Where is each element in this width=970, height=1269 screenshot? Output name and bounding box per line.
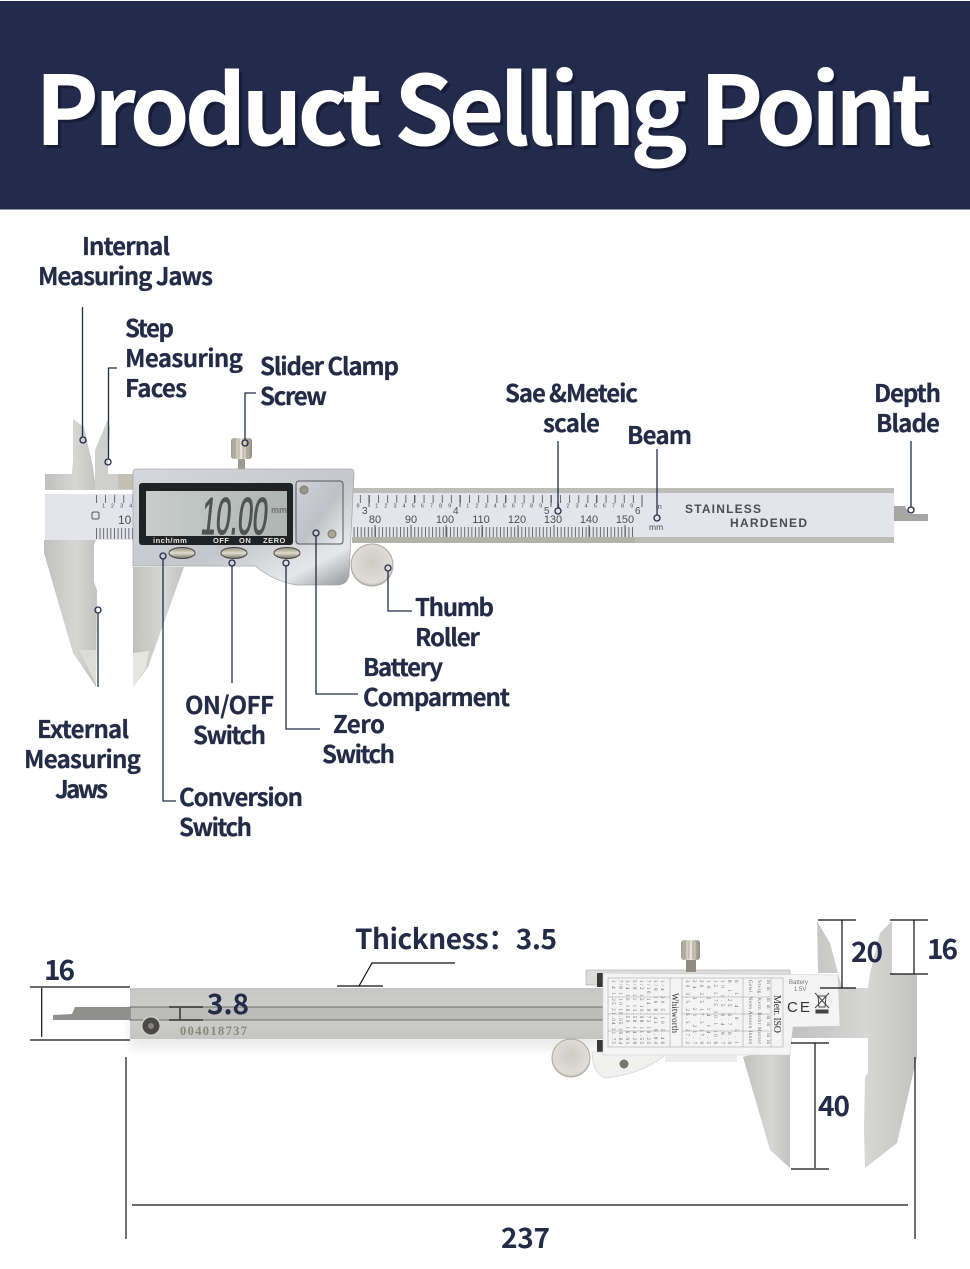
table values: 5/8 11 13.58 14.28 xyxy=(631,980,636,1044)
beam scales: 123456789 xyxy=(557,504,639,510)
table values: 1/2 12 10.98 11.55 xyxy=(638,980,643,1044)
label: Thumb Roller: Thumb xyxy=(415,588,494,623)
dimension: thickness 3.5: Thickness：3.5 xyxy=(355,918,557,958)
beam scales: 123456789 xyxy=(466,504,548,510)
beam scales: 123456789 xyxy=(375,504,457,510)
beam scales: 6 xyxy=(635,506,641,517)
sticker with tables: Metr. ISO xyxy=(771,995,782,1033)
leader lines and markers xyxy=(80,307,914,801)
label: External Measuring Jaws: External xyxy=(37,710,129,745)
label: ON/OFF Switch: Switch xyxy=(193,716,266,751)
table values: 3/8 16 8.43 8.80 xyxy=(652,980,657,1045)
table values: 7/16 14 9.73 10.25 xyxy=(645,980,650,1044)
beam scales: 130 xyxy=(544,514,562,526)
dimension: outer jaw 40: 40 xyxy=(818,1085,850,1125)
LCD display: inch/mm xyxy=(153,536,187,545)
beam engraving xyxy=(685,502,807,530)
label: Battery Comparment xyxy=(363,648,510,713)
beam scales: 4 xyxy=(453,506,459,517)
label: Internal Measuring Jaws: Measuring Jaws xyxy=(38,257,213,292)
table values: 8 1.25 6.7 6.9 xyxy=(726,980,731,1044)
table values: Gewi. Nenn Aussen Innen xyxy=(747,980,752,1044)
beam scales: mm xyxy=(649,522,663,532)
label: Slider Clamp Screw xyxy=(260,347,399,412)
beam scales: 150 xyxy=(616,514,634,526)
serial number: 004018737 xyxy=(180,1024,247,1038)
sticker with tables: Whitworth xyxy=(670,993,680,1034)
label: Depth Blade: Blade xyxy=(876,404,940,439)
slider clamp screw xyxy=(231,438,252,470)
LCD display: mm xyxy=(271,505,287,515)
back clamp screw xyxy=(681,940,700,972)
beam engraving: HARDENED xyxy=(730,516,807,530)
label: Sae & Meteic scale: Sae &Meteic xyxy=(505,374,638,409)
caliper back view xyxy=(53,921,917,1168)
fixed scale block: 1234 xyxy=(102,504,138,510)
label: Zero Switch xyxy=(322,705,395,770)
beam scales: 9 xyxy=(356,504,366,510)
label: External Measuring Jaws: Jaws xyxy=(55,770,108,805)
label: ON/OFF Switch: ON/OFF xyxy=(185,686,274,721)
beam scales: 80 xyxy=(369,514,381,526)
beam engraving: STAINLESS xyxy=(685,502,761,516)
label: Step Measuring Faces: Step xyxy=(125,309,174,344)
depth blade xyxy=(894,506,928,521)
dimension: inner jaw 16: 16 xyxy=(927,928,958,968)
label: Battery Comparment: Battery xyxy=(363,648,443,683)
label: Internal Measuring Jaws: Internal xyxy=(82,227,170,262)
screw xyxy=(141,1016,161,1036)
back jaws xyxy=(665,921,917,1168)
beam scales: 140 xyxy=(580,514,598,526)
label: Conversion Switch: Conversion xyxy=(179,778,303,813)
table values: 10 1.5 8.4 8.7 xyxy=(719,980,724,1044)
table values: 7/8 1 10 19.05 19.64 xyxy=(617,980,622,1044)
battery compartment xyxy=(296,481,343,544)
label: Depth Blade: Depth xyxy=(874,374,941,409)
table values: 6 1 4.9 5.1 xyxy=(733,980,738,1044)
beam scales xyxy=(354,495,663,537)
dimension lines xyxy=(30,920,928,1239)
label: Thumb Roller: Roller xyxy=(415,618,481,653)
table values: 12 1.75 10.1 10.6 xyxy=(712,980,717,1044)
beam scales: in xyxy=(656,502,662,511)
label: Slider Clamp Screw: Slider Clamp xyxy=(260,347,399,382)
label: Conversion Switch: Switch xyxy=(179,808,252,843)
label: Sae & Meteic scale: scale xyxy=(543,404,600,439)
beam xyxy=(352,488,894,543)
external measuring jaws xyxy=(44,540,184,687)
dimension: blade height 16: 16 xyxy=(44,949,75,989)
table values: 16 2 14 14.5 xyxy=(705,980,710,1044)
label: ON/OFF Switch xyxy=(185,686,274,751)
slider back plate xyxy=(586,970,790,1078)
header banner xyxy=(0,1,970,210)
caliper front view xyxy=(44,419,928,687)
table grid xyxy=(608,978,783,1047)
LCD display: ON xyxy=(239,536,251,545)
label: External Measuring Jaws xyxy=(24,710,141,805)
LCD display xyxy=(139,483,293,546)
LCD display: OFF xyxy=(213,536,230,545)
label: Conversion Switch xyxy=(179,778,303,843)
sticker with tables: Battery xyxy=(789,980,808,986)
title: Product Selling Point xyxy=(35,34,932,173)
LCD display: 10.00 xyxy=(199,488,271,546)
label: Thumb Roller xyxy=(415,588,494,653)
table values: 1 4 1.25 21.04 21.75 xyxy=(610,980,615,1044)
label: Slider Clamp Screw: Screw xyxy=(260,377,327,412)
thumb roller xyxy=(351,544,393,586)
table values: 1/4 20 5.10 5.46 xyxy=(659,980,664,1045)
label: Zero Switch: Switch xyxy=(322,735,395,770)
label: Internal Measuring Jaws xyxy=(38,227,213,292)
internal measuring jaws xyxy=(45,419,133,490)
table values: mm mm mm mm xyxy=(765,980,770,1044)
label: Beam: Beam xyxy=(627,416,692,451)
back beam xyxy=(130,988,604,1039)
beam scales: 3 xyxy=(362,506,368,517)
back depth blade xyxy=(53,1007,130,1020)
table values: 24 3 21 21.7 xyxy=(691,980,696,1044)
dimension: blade width 3.8: 3.8 xyxy=(207,983,249,1023)
label: Depth Blade xyxy=(874,374,941,439)
beam scales: 110 xyxy=(472,514,490,526)
table values: 30 3.5 26.5 27.2 xyxy=(684,980,689,1044)
label: Step Measuring Faces xyxy=(125,309,243,404)
beam scales: 120 xyxy=(508,514,526,526)
label: External Measuring Jaws: Measuring xyxy=(24,740,141,775)
label: Battery Comparment: Comparment xyxy=(363,678,510,713)
WEEE icon xyxy=(815,993,829,1013)
fixed scale block xyxy=(45,494,138,540)
back thumb roller xyxy=(552,1039,590,1077)
dimension: total length 237: 237 xyxy=(501,1217,550,1257)
table values: Steig. Kern Bohr Mutter xyxy=(756,980,761,1044)
label: Step Measuring Faces: Measuring xyxy=(125,339,243,374)
soft shadow xyxy=(130,1005,600,1049)
sticker with tables: 1.5V xyxy=(794,987,806,993)
label: Step Measuring Faces: Faces xyxy=(125,369,187,404)
label: Zero Switch: Zero xyxy=(333,705,385,740)
dimension: inner jaw 20: 20 xyxy=(851,931,883,971)
table values: 20 2.5 17.3 17.9 xyxy=(698,980,703,1044)
sticker with tables: CE xyxy=(787,999,812,1016)
table values: 3/4 10 16.50 16.93 xyxy=(624,980,629,1044)
buttons xyxy=(169,548,300,558)
label: Sae & Meteic scale xyxy=(505,374,638,439)
slider body xyxy=(133,469,354,585)
LCD display: ZERO xyxy=(263,536,286,545)
table values xyxy=(610,980,770,1044)
beam scales: 100 xyxy=(436,514,454,526)
beam scales: 90 xyxy=(405,514,417,526)
title: Product Selling Point xyxy=(38,37,935,176)
fixed scale block: 10 xyxy=(118,513,132,527)
sticker with tables xyxy=(603,973,840,1055)
beam scales: 5 xyxy=(544,506,550,517)
